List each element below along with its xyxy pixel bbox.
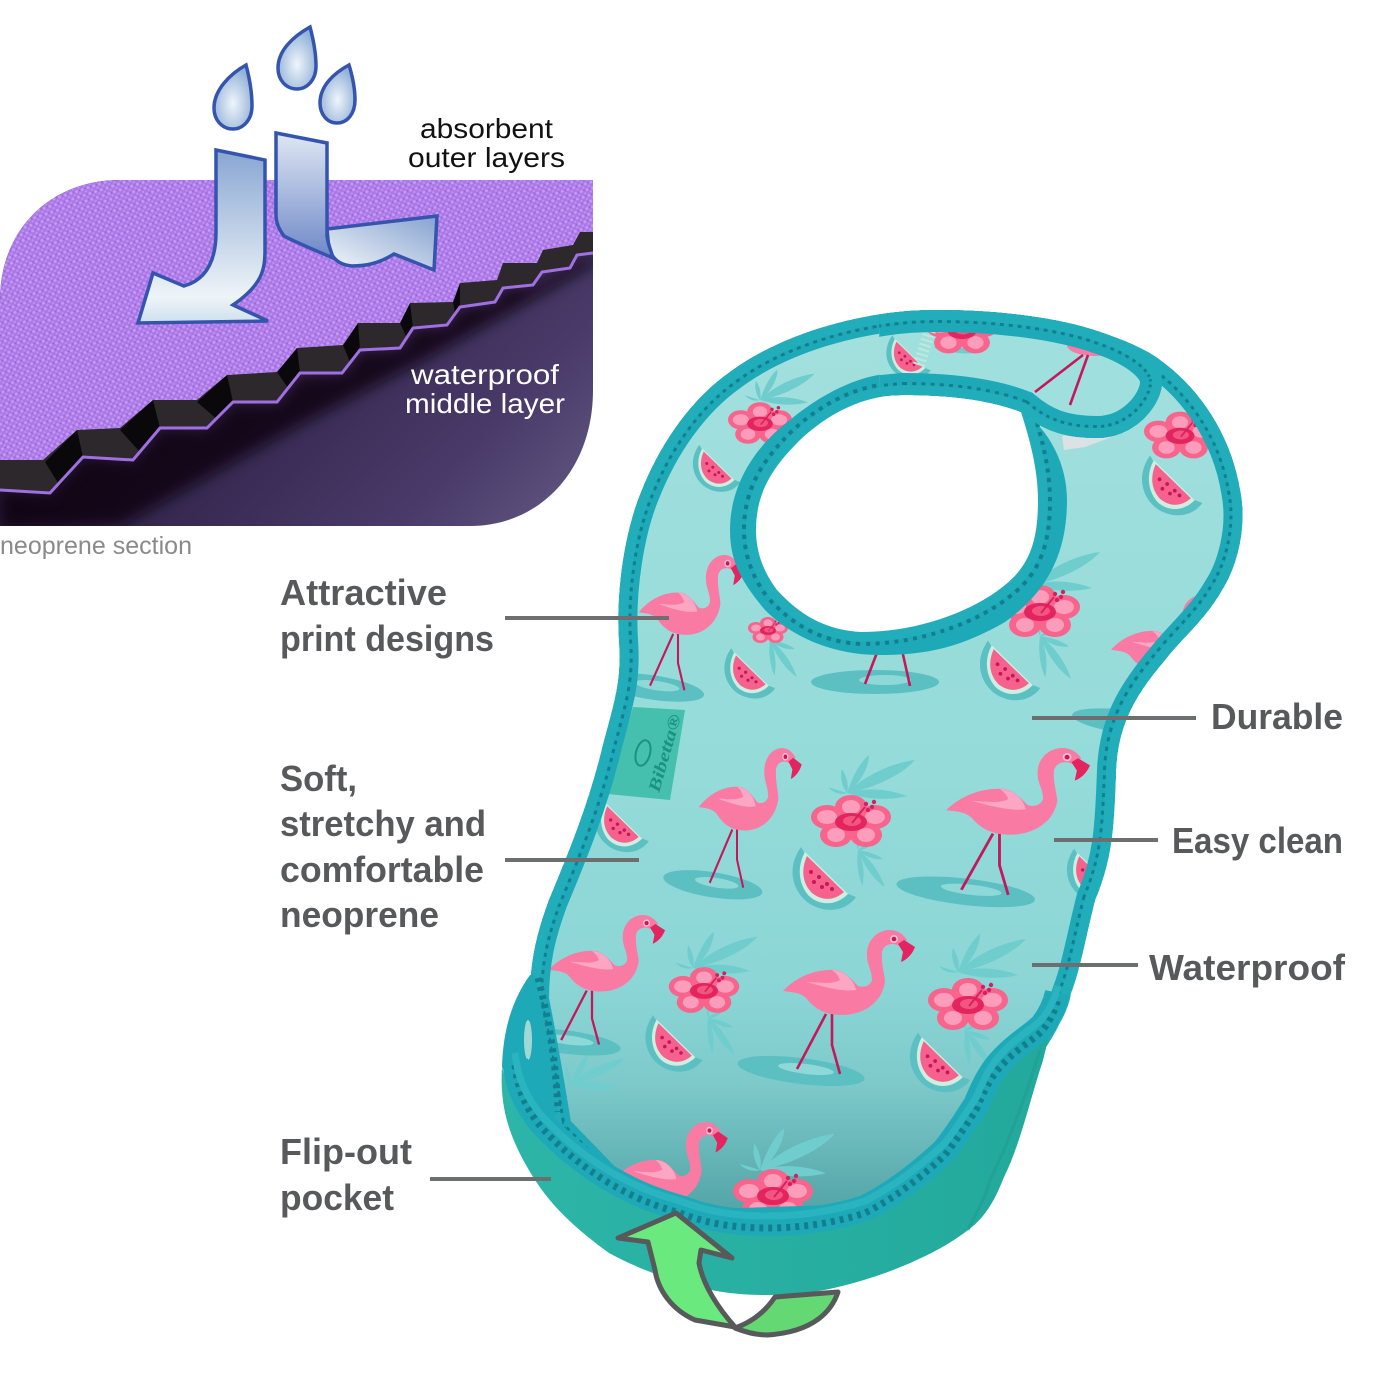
label: waterproof	[1032, 947, 1346, 988]
label: durable	[1032, 696, 1343, 737]
care label tag: Bibetta®	[644, 712, 685, 795]
bib edge binding	[530, 310, 1242, 1230]
label: attractive print designs: Attractive	[280, 572, 447, 613]
label: waterproof middle layer: middle layer	[405, 388, 565, 419]
dark underside of the neoprene	[0, 180, 593, 526]
label: waterproof middle layer: waterproof	[410, 359, 559, 390]
label: soft, stretchy and comfortable neoprene	[280, 758, 639, 935]
label: soft, stretchy and comfortable neoprene: comfortable	[280, 849, 484, 890]
panel: neoprene section	[0, 180, 593, 530]
caption: neoprene section: neoprene section	[0, 532, 192, 560]
icon: arrow passing through outer layer	[138, 150, 268, 323]
strap tab	[879, 310, 1162, 438]
bib side of pocket	[900, 1027, 1051, 1260]
bib print pattern	[507, 370, 1223, 1276]
bib body fabric	[530, 310, 1242, 1230]
pocket left raised edge	[502, 975, 558, 1127]
care label tag	[608, 707, 685, 800]
label: soft, stretchy and comfortable neoprene: Soft,	[280, 758, 357, 799]
label: soft, stretchy and comfortable neoprene: neoprene	[280, 894, 439, 935]
label: easy clean	[1054, 820, 1343, 861]
flip-out pocket	[502, 986, 1058, 1295]
black foam middle layer	[0, 225, 593, 493]
illustration: bib	[502, 307, 1242, 1295]
label: durable: Durable	[1211, 696, 1343, 737]
label: absorbent outer layers	[408, 113, 565, 173]
label: easy clean: Easy clean	[1172, 820, 1343, 861]
foam deep shadow notches	[45, 283, 460, 486]
foam shadow	[0, 253, 593, 530]
label: absorbent outer layers: outer layers	[408, 142, 565, 173]
neck ring binding	[730, 373, 1067, 655]
icon: water drops	[214, 27, 355, 129]
label: soft, stretchy and comfortable neoprene: stretchy and	[280, 803, 486, 844]
velcro patch	[1062, 418, 1140, 450]
label: attractive print designs	[280, 572, 669, 659]
label: waterproof: Waterproof	[1149, 947, 1346, 988]
label: absorbent outer layers: absorbent	[420, 113, 553, 144]
label: flip-out pocket: Flip-out	[280, 1131, 412, 1172]
purple absorbent top layer	[0, 180, 593, 460]
label: waterproof middle layer	[405, 359, 565, 419]
icon: arrow deflected by waterproof layer	[276, 133, 437, 270]
neck hole	[756, 395, 1038, 632]
label: flip-out pocket	[280, 1131, 551, 1218]
label: attractive print designs: print designs	[280, 618, 494, 659]
icon: green flip arrow	[618, 1213, 838, 1335]
thin lower purple layer	[0, 253, 593, 493]
label: flip-out pocket: pocket	[280, 1177, 394, 1218]
